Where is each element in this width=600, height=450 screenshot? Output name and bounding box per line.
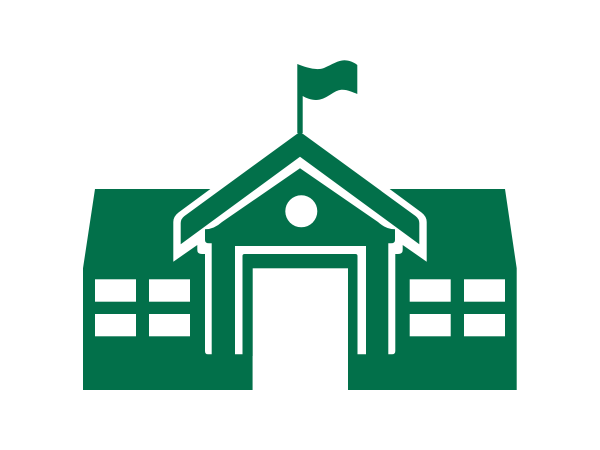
gable round window <box>285 195 317 227</box>
left windows <box>95 279 190 336</box>
building wings <box>83 189 517 390</box>
flag and pole <box>297 60 357 133</box>
roof <box>181 132 419 244</box>
door frame <box>235 246 366 354</box>
right windows <box>410 279 505 336</box>
portico with gable <box>205 168 395 356</box>
roof and pillar outline <box>173 123 427 354</box>
door opening <box>253 268 348 393</box>
